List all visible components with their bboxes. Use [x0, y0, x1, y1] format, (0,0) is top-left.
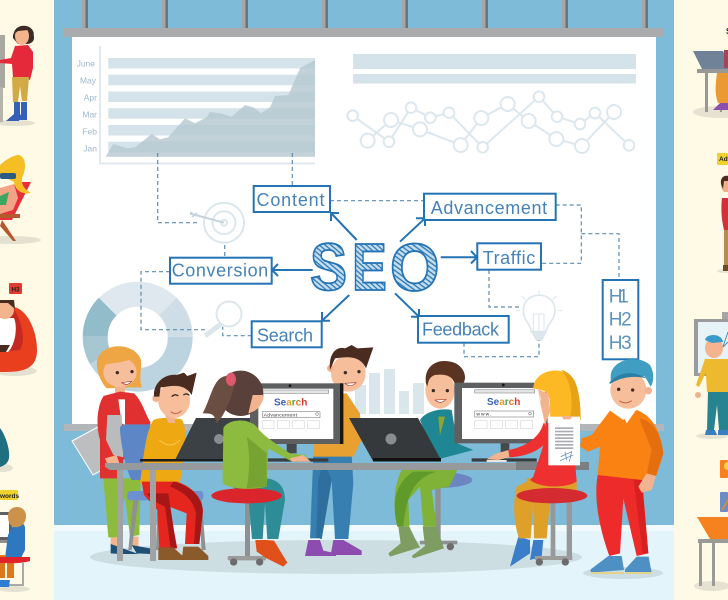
stool seat [211, 488, 282, 503]
icon: magnifier [205, 302, 242, 336]
area chart: Mar [82, 110, 97, 120]
person: standing boy [305, 345, 373, 556]
area chart: Jan [83, 144, 97, 154]
presenter at board [694, 312, 728, 439]
arrow: to Advancement [400, 218, 425, 242]
document with chart held by woman [548, 416, 580, 465]
arrow: to Feedback [395, 293, 419, 317]
monitor: left: Search [274, 398, 307, 409]
girl hoodie [223, 420, 310, 489]
area chart [77, 46, 315, 164]
person: woman with blond hair [487, 370, 587, 567]
icon: target [190, 203, 244, 243]
person: girl in green hoodie [203, 371, 311, 567]
box: Traffic: Traffic [483, 248, 535, 268]
floor shadow [90, 540, 582, 574]
whiteboard tray [64, 424, 664, 431]
H3 tag [9, 283, 22, 294]
man on beanbag [0, 300, 37, 376]
box: Search [252, 321, 322, 347]
area chart: June [77, 59, 95, 69]
ceiling posts [82, 0, 648, 29]
table top [105, 462, 589, 561]
people right half, behind table [388, 361, 473, 558]
Advancement tag [717, 153, 728, 165]
icon: lightbulb [516, 290, 562, 340]
whiteboard [72, 36, 656, 424]
area chart: Apr [84, 93, 97, 103]
wrench icon tile [720, 492, 728, 512]
people left half, behind table [97, 345, 373, 566]
laptop: left [140, 418, 250, 462]
H3 tag: H3 [11, 286, 20, 294]
box: Content [254, 186, 330, 212]
box: Conversion: Conversion [172, 261, 268, 281]
keywords tag: words [0, 493, 20, 500]
SEO title: O [390, 230, 440, 305]
table legs [117, 470, 123, 561]
SEO title [310, 230, 440, 305]
monitor: right: www. [476, 412, 491, 418]
person: man in teal jacket [388, 361, 473, 558]
whiteboard top rail [64, 28, 664, 37]
box: Advancement [424, 194, 556, 220]
girl head [218, 371, 263, 416]
monitor: right: Search [487, 397, 520, 408]
teal figure fragment [0, 428, 13, 472]
area chart: May [80, 75, 97, 85]
box: Advancement: Advancement [431, 198, 547, 218]
SEO title: E [352, 230, 387, 304]
chair: blue [120, 424, 206, 550]
arrows from SEO [272, 213, 477, 321]
box: H1 H2 H3 [603, 280, 638, 359]
area chart: Feb [82, 127, 97, 137]
orange laptop desk [694, 517, 728, 591]
person: boy in orange sweater [580, 359, 663, 574]
box: Feedback [418, 316, 509, 343]
right boy shadow [583, 567, 663, 579]
keywords tag [0, 490, 20, 500]
dashed connectors [141, 153, 619, 357]
box: Search: Search [257, 326, 313, 346]
girl chair post [228, 500, 266, 566]
bar chart background [355, 369, 424, 414]
girl shoes [255, 540, 287, 567]
man in red [717, 176, 728, 273]
network line chart [347, 91, 634, 153]
person: boy in yellow sweater [140, 373, 208, 560]
SEO title: S [310, 230, 347, 305]
laptop worker [693, 27, 728, 118]
panel: left character strip [0, 26, 41, 592]
folder behind table [72, 415, 124, 475]
box: Feedback: Feedback [422, 320, 500, 340]
monitor: right [454, 383, 548, 462]
arrow: to Search [322, 295, 349, 321]
header bars [353, 54, 636, 84]
girl trousers [223, 478, 285, 539]
arrow: to Content [331, 213, 357, 240]
person at computer on stool [0, 507, 30, 592]
box: H1 H2 H3: H1 [609, 286, 629, 307]
donut chart [83, 282, 193, 392]
panel: right character strip [693, 27, 728, 591]
woman in deck chair [0, 155, 41, 244]
box: H1 H2 H3: H3 [609, 333, 632, 354]
monitor: left: Advancement [264, 412, 298, 418]
woman at board [0, 26, 35, 126]
box: H1 H2 H3: H2 [609, 310, 632, 331]
laptop: right [349, 418, 441, 462]
monitor: left [250, 383, 343, 462]
person: woman in red jacket [97, 346, 151, 554]
arrow: to Conversion [272, 264, 313, 276]
bulb icon tile [720, 460, 728, 478]
arrow: to Traffic [441, 251, 477, 264]
box: Content: Content [256, 190, 324, 210]
box: Traffic [477, 243, 541, 270]
